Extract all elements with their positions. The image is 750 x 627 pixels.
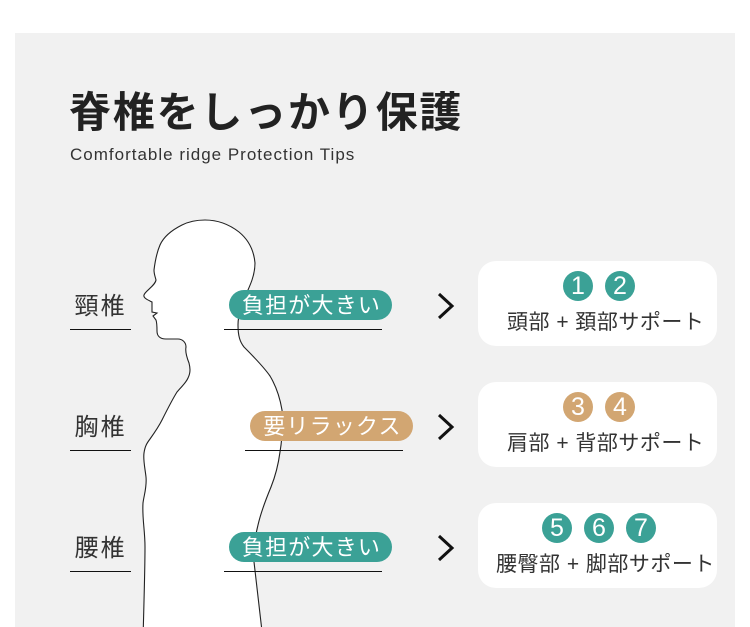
card: waist and leg support: 6	[592, 514, 606, 542]
card: head and neck support: 1	[571, 272, 585, 300]
title: 脊椎をしっかり保護	[69, 89, 463, 136]
card: waist and leg support	[478, 503, 717, 588]
card: waist and leg support: 5	[550, 514, 564, 542]
arrow: neck	[438, 292, 454, 320]
card: waist and leg support: 7	[634, 514, 648, 542]
pill: heavy load, lumbar: 負担が大きい	[242, 535, 381, 560]
arrow: lumbar	[438, 534, 454, 562]
label: lumbar spine	[70, 527, 131, 572]
arrow: thoracic	[438, 414, 454, 440]
label: thoracic spine	[70, 406, 131, 451]
pill: needs relaxing: 要リラックス	[263, 414, 402, 439]
card: waist and leg support: 腰臀部 + 脚部サポート	[496, 553, 715, 576]
label: cervical spine: 頸椎	[74, 293, 126, 320]
card: shoulder and back support	[478, 382, 717, 467]
label: lumbar spine: 腰椎	[74, 535, 126, 562]
card: head and neck support	[478, 261, 717, 346]
pill: heavy load, neck: 負担が大きい	[242, 293, 381, 318]
label: thoracic spine: 胸椎	[74, 414, 126, 441]
card: shoulder and back support: 3	[571, 393, 585, 421]
card: shoulder and back support: 肩部 + 背部サポート	[507, 432, 704, 455]
card: shoulder and back support: 4	[613, 393, 627, 421]
label: cervical spine	[70, 285, 131, 330]
subtitle: Comfortable ridge Protection Tips	[70, 145, 355, 164]
card: head and neck support: 頭部 + 頚部サポート	[507, 311, 704, 334]
card: head and neck support: 2	[613, 272, 627, 300]
